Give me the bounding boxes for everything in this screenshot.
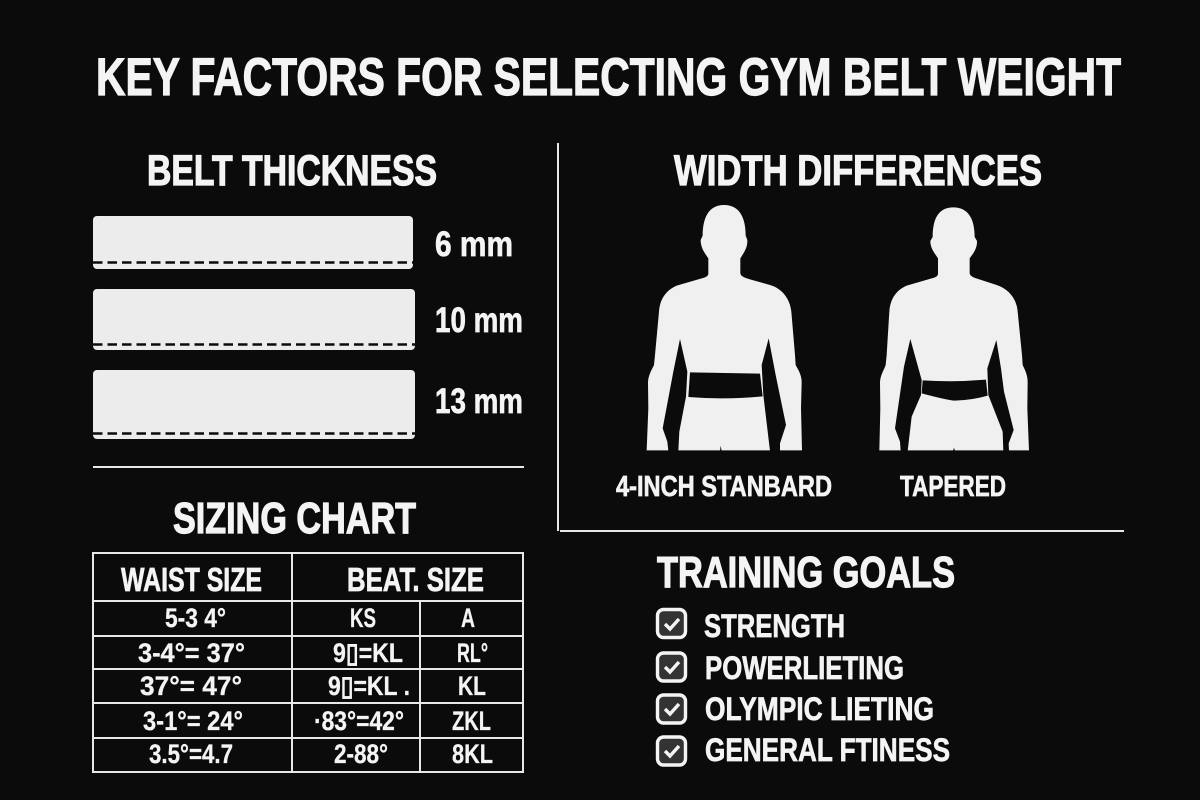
goal: strength: STRENGTH	[704, 608, 845, 644]
panel: width differences	[616, 147, 1042, 503]
label: 4-inch standard: 4-INCH STANBARD	[616, 471, 832, 503]
table rows: A	[461, 603, 475, 633]
figure: tapered belt	[879, 207, 1029, 451]
table grid	[93, 553, 523, 772]
table rows	[138, 603, 493, 769]
heading: belt thickness: BELT THICKNESS	[147, 147, 437, 195]
table rows: 9▯=KL	[333, 638, 403, 668]
belt: 6 mm	[93, 216, 513, 269]
belt: 13 mm: 13 mm	[435, 382, 523, 421]
table rows: ZKL	[452, 706, 491, 736]
label: tapered: TAPERED	[900, 471, 1006, 503]
panel: training goals	[657, 548, 955, 768]
table rows: 3-4°= 37°	[138, 638, 245, 668]
belt: 6 mm: 6 mm	[435, 225, 513, 264]
heading: training goals: TRAINING GOALS	[657, 548, 955, 597]
table rows: 5-3 4°	[165, 603, 226, 633]
table rows: 9▯=KL .	[328, 671, 410, 701]
belt: 10 mm	[93, 289, 523, 350]
table rows: 3.5°=4.7	[149, 739, 233, 769]
heading: sizing chart: SIZING CHART	[173, 494, 416, 543]
table rows: 37°= 47°	[140, 671, 242, 701]
heading: width differences: WIDTH DIFFERENCES	[674, 147, 1042, 195]
goal: olympic lifting: OLYMPIC LIETING	[705, 691, 934, 727]
figure: 4-inch standard belt	[647, 205, 802, 451]
table rows: RL°	[457, 638, 488, 668]
table header: WAIST SIZE	[121, 561, 262, 598]
table header	[121, 561, 484, 598]
table rows: 2-88°	[334, 739, 388, 769]
panel: belt thickness	[93, 147, 523, 439]
goal: powerlifting	[658, 650, 904, 686]
table rows: KS	[350, 603, 376, 633]
goal: strength	[658, 608, 845, 644]
table rows: KL	[458, 671, 486, 701]
panel: sizing chart	[93, 494, 523, 772]
belt: 13 mm	[93, 370, 523, 439]
goal: general fitness: GENERAL FTINESS	[705, 732, 950, 768]
goal: powerlifting: POWERLIETING	[705, 650, 904, 686]
belt: 10 mm: 10 mm	[435, 301, 523, 340]
table rows: 3-1°= 24°	[143, 706, 243, 736]
table rows: 8KL	[452, 739, 493, 769]
table rows: ·83°=42°	[314, 706, 404, 736]
table header: BEAT. SIZE	[347, 561, 484, 598]
